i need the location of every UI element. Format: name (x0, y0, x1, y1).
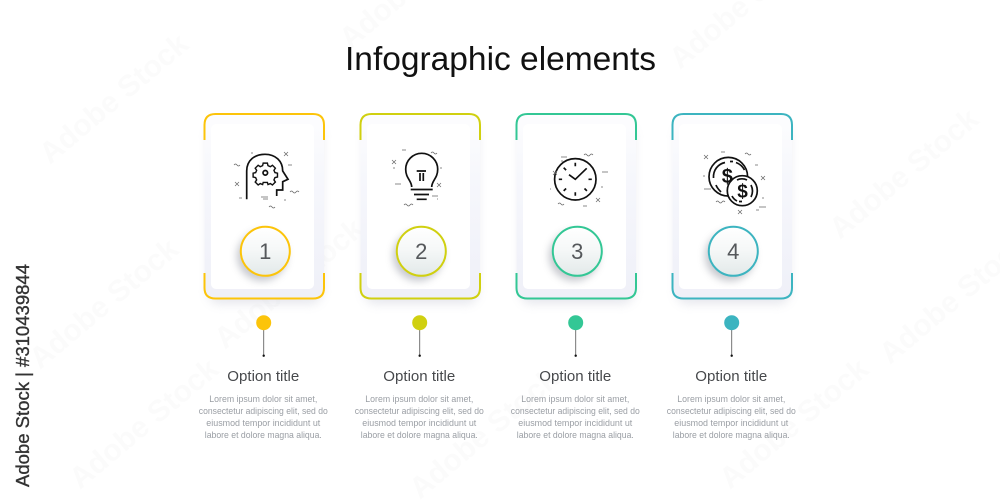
text: Adobe Stock (33, 27, 195, 170)
text block: option 2: consectetur adipiscing elit, sed do (355, 406, 484, 417)
text block: option 4: Option title (695, 368, 767, 385)
text: Adobe Stock (403, 362, 565, 502)
text block: option 2: labore et dolore magna aliqua. (361, 430, 478, 441)
text block: option 4: labore et dolore magna aliqua. (673, 430, 790, 441)
pin marker 1 (256, 315, 271, 357)
text block: option 3: labore et dolore magna aliqua. (517, 430, 634, 441)
text block: option 3: Option title (539, 368, 611, 385)
text: Adobe Stock (823, 102, 985, 245)
text block: option 1: eiusmod tempor incididunt ut (206, 418, 321, 429)
stock watermark id: Adobe Stock | #310439844 (13, 264, 33, 487)
text block: option 2: Option title (383, 368, 455, 385)
icon: light bulb (392, 150, 442, 206)
text block: option 1: Option title (227, 368, 299, 385)
icon: clock (550, 154, 608, 206)
text: Adobe Stock (23, 232, 185, 375)
panel: option 3 card (516, 114, 636, 304)
number badge 3: 3 (571, 239, 583, 264)
panel: option 1 card (204, 114, 324, 304)
number badge 2 (393, 227, 446, 281)
text block: option 2 (355, 368, 484, 441)
text block: option 2: eiusmod tempor incididunt ut (362, 418, 477, 429)
text block: option 3: consectetur adipiscing elit, sed do (511, 406, 640, 417)
icon: coins with dollar signs: $ (722, 166, 733, 188)
number badge 2: 2 (415, 239, 427, 264)
pin marker 4 (724, 315, 739, 357)
pin marker 2 (412, 315, 427, 357)
text: Adobe Stock (208, 212, 370, 355)
text: Adobe Stock (63, 352, 225, 495)
text block: option 4: Lorem ipsum dolor sit amet, (677, 394, 785, 405)
number badge 4: 4 (727, 239, 739, 264)
text block: option 4 (667, 368, 796, 441)
text block: option 3: eiusmod tempor incididunt ut (518, 418, 633, 429)
number badge 3 (549, 227, 602, 281)
text block: option 3: Lorem ipsum dolor sit amet, (521, 394, 629, 405)
icon: head with gear (234, 152, 299, 208)
text block: option 1: Lorem ipsum dolor sit amet, (209, 394, 317, 405)
icon: decorative marks around coins (703, 152, 766, 214)
text block: option 4: eiusmod tempor incididunt ut (674, 418, 789, 429)
panel: option 2 card (360, 114, 480, 304)
text: Adobe Stock (713, 352, 875, 495)
pin marker 3 (568, 315, 583, 357)
icon: coins with dollar signs (709, 157, 757, 206)
title: Infographic elements (345, 41, 656, 78)
text block: option 1: consectetur adipiscing elit, sed do (199, 406, 328, 417)
panel: option 4 card (672, 114, 792, 304)
number badge 1: 1 (259, 239, 271, 264)
number badge 1 (237, 227, 290, 281)
icon: coins with dollar signs: $ (737, 182, 748, 202)
text block: option 3 (511, 368, 640, 441)
number badge 4 (705, 227, 758, 281)
text block: option 1 (199, 368, 328, 441)
text block: option 2: Lorem ipsum dolor sit amet, (365, 394, 473, 405)
text block: option 1: labore et dolore magna aliqua. (205, 430, 322, 441)
text block: option 4: consectetur adipiscing elit, sed do (667, 406, 796, 417)
